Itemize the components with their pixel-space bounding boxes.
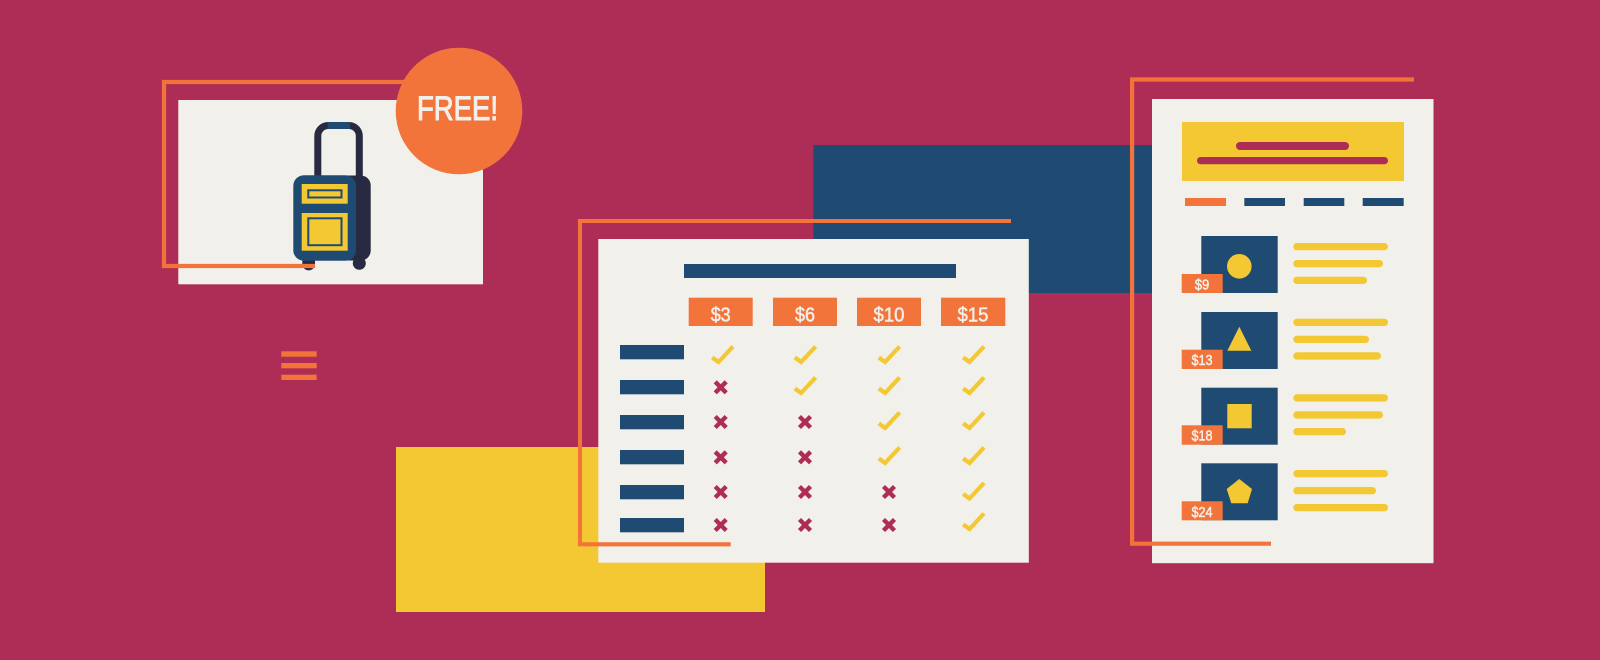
- bottom pocket outline: [308, 218, 342, 245]
- handle grip: [328, 122, 350, 129]
- left wheel: [302, 258, 315, 270]
- price: $10: $10: [874, 305, 904, 327]
- table background: [598, 239, 1029, 563]
- table title bar: [684, 264, 956, 278]
- list item: $13 triangle: [1182, 312, 1388, 369]
- price: $15: [941, 298, 1005, 327]
- suitcase back: [335, 176, 371, 260]
- page background: [1152, 99, 1434, 563]
- list item: $18 square: [1182, 388, 1388, 445]
- price: $3: [689, 298, 753, 327]
- top pocket: [302, 184, 348, 204]
- badge: free: [396, 48, 522, 174]
- badge text: FREE!: [417, 90, 498, 128]
- frame: luggage panel: [164, 82, 420, 266]
- price: $10: [857, 298, 921, 327]
- top pocket outline: [308, 190, 342, 198]
- price: $3: $3: [711, 305, 731, 327]
- panel background: [178, 100, 483, 284]
- frame: table panel: [580, 221, 1011, 544]
- decorative block: navy: [813, 145, 1153, 293]
- icon: suitcase: [293, 122, 371, 270]
- right wheel: [353, 257, 366, 270]
- bottom pocket: [302, 213, 348, 251]
- list item: $24 pentagon: [1182, 463, 1388, 521]
- price: $15: $15: [958, 305, 988, 327]
- panel: pricing comparison table: [598, 239, 1029, 563]
- feature row labels: [620, 345, 684, 532]
- price headers: [689, 298, 1005, 327]
- list item: $18 square: $18: [1192, 428, 1212, 444]
- frame: price list page: [1132, 80, 1414, 544]
- suitcase body: [293, 175, 356, 261]
- panel: price list page: [1152, 99, 1434, 563]
- panel: free luggage: [178, 100, 483, 284]
- list item: $9 circle: [1182, 236, 1388, 293]
- page header banner: [1182, 122, 1404, 181]
- navigation tabs: [1185, 198, 1404, 206]
- list item: $9 circle: $9: [1195, 276, 1209, 293]
- decorative block: yellow: [396, 447, 765, 612]
- suitcase handle: [318, 126, 359, 180]
- badge circle: [396, 48, 522, 174]
- icon: hamburger menu: [281, 351, 317, 380]
- check marks: [712, 346, 984, 529]
- price: $6: $6: [795, 305, 815, 327]
- list item: $13 triangle: $13: [1192, 352, 1212, 369]
- cross marks: [715, 382, 894, 530]
- price: $6: [773, 298, 837, 327]
- list item: $24 pentagon: $24: [1192, 504, 1212, 521]
